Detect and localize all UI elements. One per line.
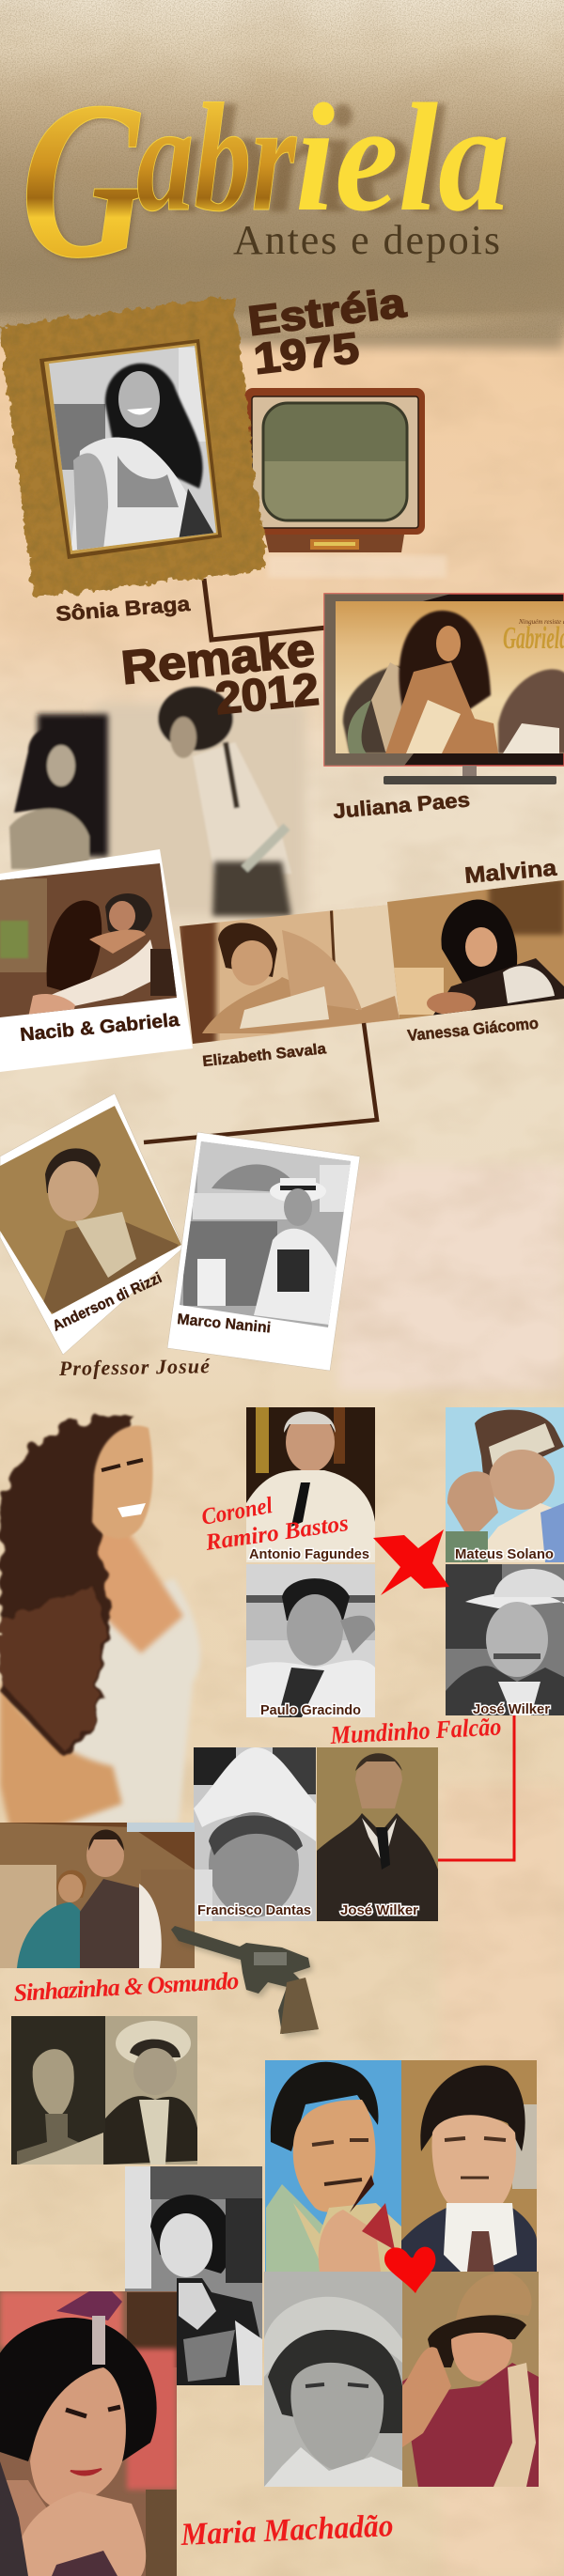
polaroid: Anderson di Rizzi: Anderson di Rizzi — [51, 1270, 164, 1335]
label: Juliana Paes: Juliana Paes — [332, 787, 471, 823]
heading: Estréia 1975: 1975 — [251, 323, 361, 383]
label: Sônia Braga: Sônia Braga — [55, 592, 192, 626]
photo: Dr. Ezequiel 1975, blue background — [265, 2060, 401, 2272]
name labels on cast photos: Antonio Fagundes — [249, 1546, 369, 1562]
name labels: Francisco Dantas, José Wilker — [197, 1902, 418, 1918]
photo: Sinhazinha 1975 — [11, 2016, 105, 2165]
name labels on cast photos — [249, 1546, 554, 1718]
label: Elizabeth Savala: Elizabeth Savala — [202, 1041, 327, 1070]
photo strip: Malvina, Vanessa Giácomo — [387, 878, 564, 1019]
photo strip: Malvina, Elizabeth Savala — [179, 902, 401, 1052]
label: Malvina: Malvina — [463, 855, 558, 889]
subtitle: Antes e depois — [233, 217, 500, 263]
title: Gabriela — [21, 54, 510, 306]
heading: Estréia 1975 — [245, 280, 409, 383]
photo: José Wilker older — [317, 1747, 438, 1921]
polaroid: Marco Nanini: Marco Nanini — [177, 1311, 272, 1337]
photo: Dona Arminda remake, red dress — [402, 2272, 539, 2487]
polaroid: Anderson di Rizzi — [0, 1094, 183, 1355]
photo: Mateus Solano — [446, 1407, 564, 1562]
photo: Maria Machadão remake — [0, 2283, 177, 2576]
caption: Coronel Ramiro Bastos — [199, 1493, 350, 1556]
title: Gabriela: G — [23, 56, 149, 306]
photo: Paulo Gracindo — [246, 1564, 375, 1719]
title: Gabriela: iela — [295, 71, 509, 243]
photo: Dr. Ezequiel remake, dark suit — [401, 2060, 537, 2272]
icon: red heart — [384, 2247, 435, 2293]
name labels on cast photos: José Wilker — [473, 1701, 550, 1717]
name labels: Francisco Dantas, José Wilker: José Wilker — [340, 1902, 418, 1918]
caption: Maria Machadão: Maria Machadão — [180, 2508, 394, 2553]
connector line — [144, 1023, 377, 1142]
old photo: Nacib and Gabriela 1975 — [9, 687, 306, 916]
heading: Remake 2012: 2012 — [213, 664, 321, 724]
old television — [244, 388, 446, 578]
connector line — [204, 579, 336, 640]
photo: Osmundo 1975 — [105, 2016, 197, 2165]
name labels on cast photos: Paulo Gracindo — [260, 1702, 361, 1718]
photo: Antonio Fagundes — [246, 1407, 375, 1562]
polaroid: Nacib & Gabriela — [0, 849, 193, 1072]
caption: Professor Josué: Professor Josué — [58, 1354, 211, 1380]
title: Gabriela: abr — [136, 71, 297, 243]
red connector line — [438, 1715, 514, 1860]
photo: Francisco Dantas — [194, 1747, 316, 1921]
label: Vanessa Giácomo: Vanessa Giácomo — [407, 1015, 540, 1045]
caption: Sinhazinha & Osmundo: Sinhazinha & Osmundo — [13, 1967, 240, 2007]
caption: Coronel Ramiro Bastos: Coronel — [199, 1493, 274, 1530]
caption: Coronel Ramiro Bastos: Ramiro Bastos — [203, 1511, 350, 1556]
heading: Remake 2012: Remake — [119, 623, 317, 694]
photo: Maria Machadão 1975 — [125, 2166, 262, 2385]
portrait: Juliana Paes as Gabriela — [0, 1416, 200, 1827]
title: Gabriela: G — [21, 54, 148, 304]
modern television with remake poster — [324, 594, 564, 784]
photo: Sinhazinha and Osmundo — [0, 1821, 195, 1968]
ornate gold frame with Sônia Braga photo — [0, 296, 267, 597]
photo: Dona Arminda 1975, hat — [264, 2272, 402, 2487]
photo: José Wilker young — [446, 1564, 564, 1715]
icon: red X versus mark — [373, 1529, 449, 1595]
polaroid: Nacib & Gabriela: Nacib & Gabriela — [19, 1010, 181, 1046]
name labels on cast photos: Mateus Solano — [455, 1546, 554, 1562]
heading: Remake 2012 — [119, 623, 321, 724]
icon: revolver — [171, 1926, 321, 2038]
name labels: Francisco Dantas, José Wilker: Francisco Dantas — [197, 1902, 311, 1918]
heading: Estréia 1975: Estréia — [245, 280, 409, 345]
polaroid: Marco Nanini — [167, 1132, 360, 1371]
caption: Mundinho Falcão: Mundinho Falcão — [329, 1713, 502, 1749]
